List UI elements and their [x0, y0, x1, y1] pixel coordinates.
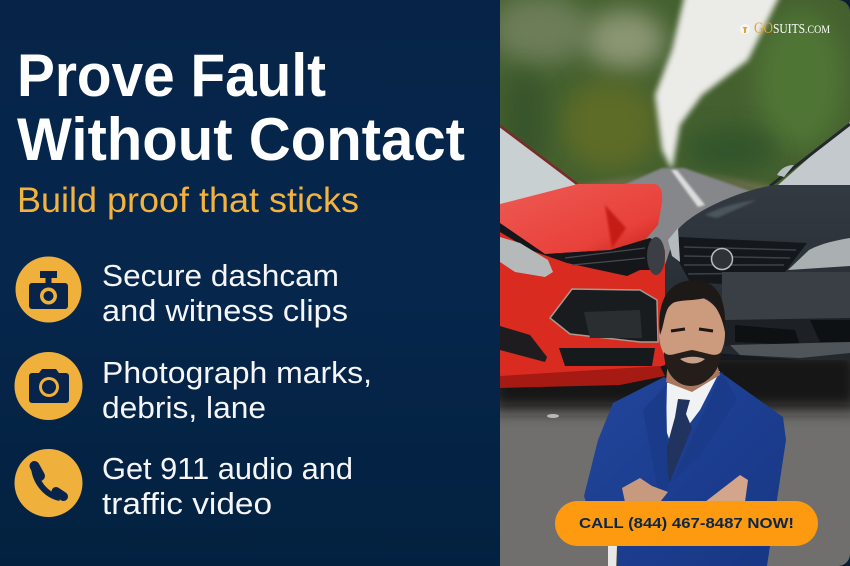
call to action button: CALL (844) 467-8487 NOW! [579, 515, 794, 532]
panel: text panel background [0, 0, 500, 566]
text: photograph marks: Photograph marks, [102, 355, 372, 390]
attorney crossed arms [622, 475, 748, 502]
text: secure dashcam: and witness clips [102, 293, 348, 328]
text: secure dashcam: Secure dashcam [102, 258, 339, 293]
text: 911 audio: Get 911 audio and [102, 451, 353, 486]
road in distance [580, 166, 771, 265]
item: photograph marks [14, 352, 372, 425]
attorney head [659, 280, 725, 386]
title [17, 42, 465, 173]
red car [500, 126, 665, 388]
dark car [660, 122, 850, 360]
attorney tie [666, 399, 692, 484]
item: 911 audio [14, 449, 353, 521]
icon: phone [14, 449, 82, 517]
icon: dashcam [16, 256, 82, 322]
call to action button [555, 501, 818, 546]
asphalt foreground [490, 350, 850, 566]
logo: gosuits.com [740, 22, 830, 34]
attorney neck [666, 366, 720, 392]
text: secure dashcam [102, 258, 348, 328]
photo corner bottom right [838, 554, 850, 566]
item: dashcam and witness clips [16, 256, 348, 328]
photo: car collision scene with attorney [490, 0, 850, 566]
logo: gosuits.com: GOSUITS.COM [754, 20, 830, 37]
text: 911 audio: traffic video [102, 486, 272, 521]
icon: camera [14, 352, 82, 420]
text: photograph marks [102, 355, 372, 425]
photo corner top right [838, 0, 850, 12]
title: Without Contact [17, 106, 465, 173]
subtitle: Build proof that sticks [17, 181, 359, 220]
text: 911 audio [102, 451, 353, 521]
attorney suit [584, 372, 786, 566]
attorney lapels [643, 372, 731, 466]
attorney [584, 280, 786, 566]
text: photograph marks: debris, lane [102, 390, 266, 425]
attorney shirt [666, 371, 720, 439]
title: Prove Fault [17, 42, 326, 109]
background: sky and trees [490, 0, 850, 200]
